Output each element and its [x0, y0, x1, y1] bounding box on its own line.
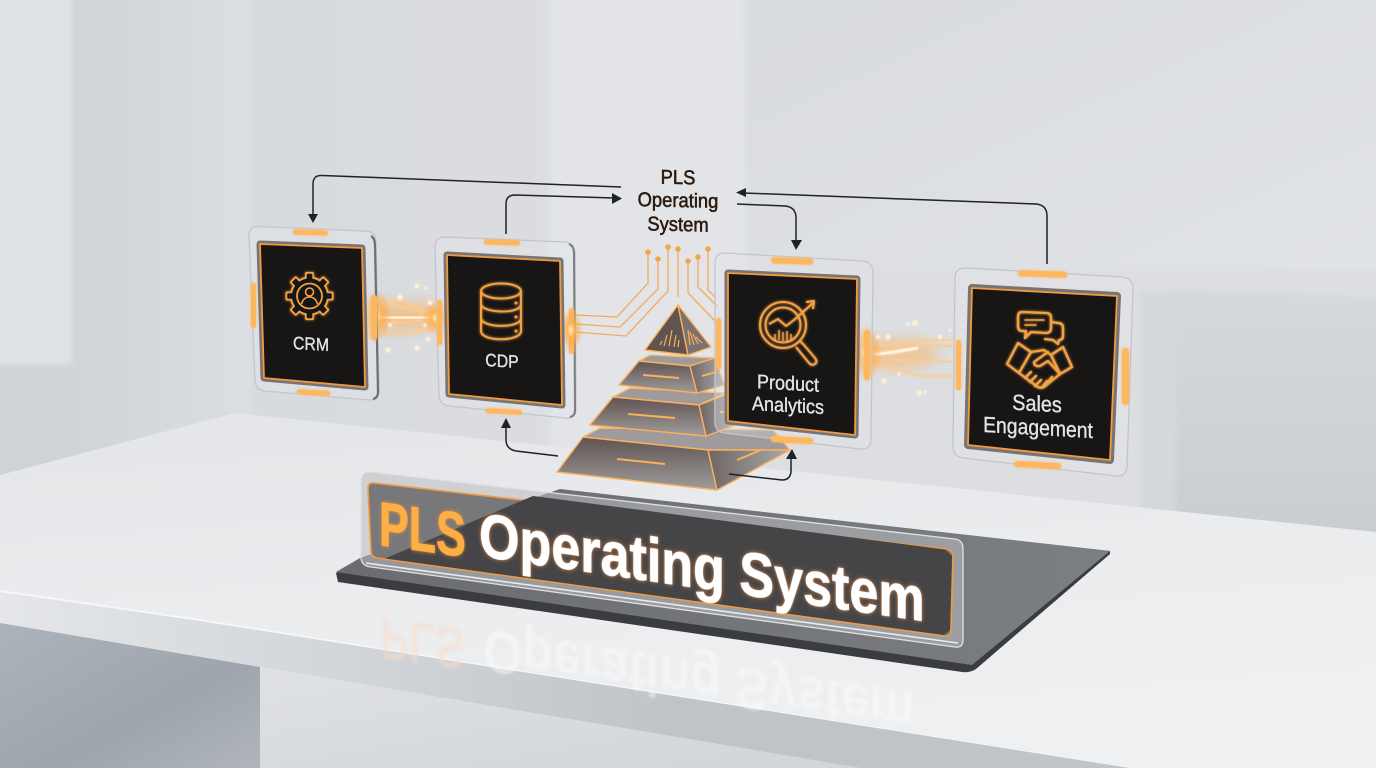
CDP glass panel	[435, 237, 576, 418]
arrow: Sales Engagement to operating system	[736, 188, 1047, 264]
Engagement label: Engagement	[983, 413, 1093, 443]
Product Analytics screen	[728, 273, 857, 435]
title sign: diagonal shade	[385, 496, 952, 635]
base plate	[336, 489, 1110, 672]
pyramid	[557, 305, 790, 490]
pyramid third tier	[590, 388, 736, 436]
heading: PLS Operating System	[638, 167, 718, 237]
card: CRM	[249, 226, 379, 400]
pyramid second tier	[619, 355, 724, 393]
reflection of title on table: PLS	[380, 603, 464, 681]
card: Product Analytics	[715, 253, 873, 449]
Sales Engagement glass panel	[953, 268, 1133, 476]
arrow: CDP to operating system	[506, 193, 622, 234]
Sales label: Sales	[1012, 391, 1062, 418]
icon: database	[481, 284, 521, 339]
circuit traces into pyramid	[575, 244, 718, 336]
title text: PLS: PLS	[379, 490, 466, 571]
connector: CRM to CDP energy wires	[360, 284, 452, 352]
arrow: pyramid to CDP	[501, 418, 558, 456]
arrow: pyramid to Product Analytics	[729, 449, 797, 480]
reflection of title on table: Operating System	[483, 616, 914, 746]
connector: Product Analytics to Sales Engagement energy wires	[850, 320, 960, 395]
heading: PLS Operating System: System	[647, 214, 709, 237]
Sales Engagement orange tabs	[956, 270, 1129, 469]
card: Sales Engagement	[953, 268, 1133, 476]
arrow: operating system to Product Analytics	[737, 204, 802, 250]
icon: gear with person	[286, 272, 334, 320]
CRM glass panel	[249, 226, 379, 400]
title sign: dark inner panel	[368, 483, 953, 636]
table	[0, 413, 1376, 768]
CRM screen	[260, 244, 365, 387]
CDP screen	[447, 255, 562, 405]
pyramid capstone with bars	[645, 305, 711, 355]
pyramid base tier	[557, 428, 790, 490]
title text: Operating System: Operating System	[479, 501, 925, 635]
Analytics label line: Analytics	[752, 393, 824, 419]
CRM orange tabs	[251, 229, 377, 396]
CRM label: CRM	[293, 333, 329, 355]
Product Analytics label: Product	[757, 371, 820, 397]
Sales Engagement screen	[968, 288, 1117, 460]
Product Analytics glass panel	[715, 253, 873, 449]
heading: PLS Operating System: PLS	[661, 167, 695, 190]
CDP orange tabs	[437, 239, 574, 415]
title sign: glass panel	[361, 472, 963, 647]
heading: PLS Operating System: Operating	[638, 189, 718, 213]
Product Analytics orange tabs	[716, 257, 870, 444]
card: CDP	[435, 237, 583, 418]
CDP label: CDP	[485, 350, 519, 372]
icon: magnifier with chart	[760, 301, 816, 365]
icon: handshake with speech bubbles	[1007, 312, 1072, 388]
arrow: operating system to CRM	[308, 175, 621, 223]
